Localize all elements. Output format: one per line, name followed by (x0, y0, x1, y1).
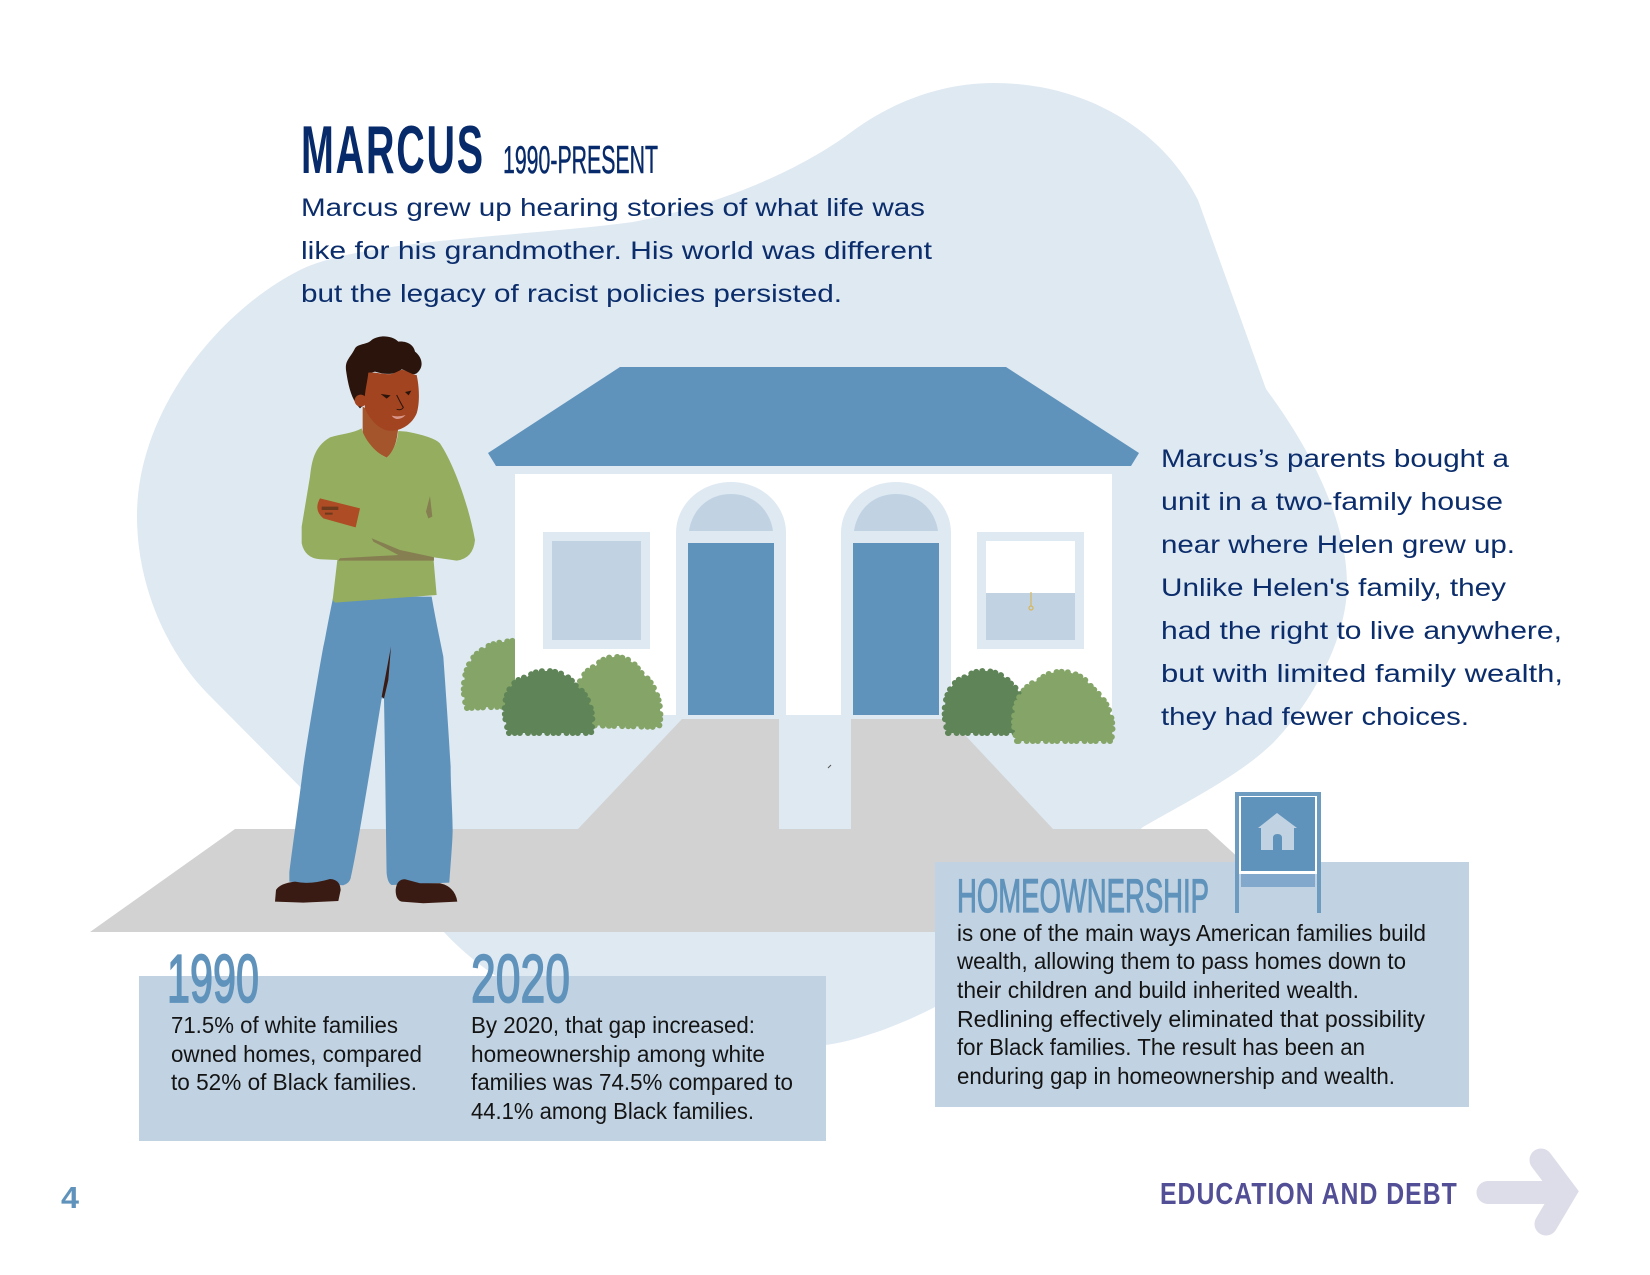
light bush right (1014, 672, 1112, 741)
homeownership text: enduring gap in homeownership and wealth. (957, 1063, 1395, 1089)
house paragraph (1161, 445, 1563, 731)
trousers and shoes (275, 597, 457, 903)
panel: homeownership (935, 862, 1469, 1107)
house paragraph: Marcus’s parents bought a (1161, 445, 1509, 473)
page number: 4 (61, 1180, 80, 1215)
homeownership text: wealth, allowing them to pass homes down to (956, 948, 1406, 974)
house paragraph: had the right to live anywhere, (1161, 617, 1562, 645)
intro text: but the legacy of racist policies persisted. (301, 280, 842, 308)
left door (676, 482, 786, 719)
house paragraph: they had fewer choices. (1161, 703, 1469, 731)
house paragraph: unit in a two-family house (1161, 488, 1503, 516)
homeownership text: for Black families. The result has been an (957, 1034, 1365, 1060)
homeownership text: their children and build inherited wealth. (957, 977, 1359, 1003)
intro text: Marcus grew up hearing stories of what life was (301, 194, 925, 222)
2020 text: 44.1% among Black families. (471, 1098, 754, 1124)
house wall (515, 474, 1112, 715)
arrow (1488, 1160, 1565, 1224)
1990 text: owned homes, compared (171, 1041, 422, 1067)
speck on path (828, 765, 831, 768)
upper body (302, 336, 475, 603)
intro text (301, 194, 932, 308)
1990 text (171, 1012, 422, 1095)
right window (977, 532, 1084, 649)
2020 text (471, 1012, 793, 1124)
roof (488, 367, 1139, 466)
icon: for sale sign with house (1235, 792, 1321, 913)
1990 text: 71.5% of white families (171, 1012, 398, 1038)
homeownership heading: HOMEOWNERSHIP (957, 869, 1209, 922)
panel: homeownership statistics (139, 941, 826, 1141)
1990 text: to 52% of Black families. (171, 1069, 417, 1095)
dark bush left (505, 671, 592, 733)
next section label: EDUCATION AND DEBT (1160, 1176, 1457, 1211)
2020 text: families was 74.5% compared to (471, 1069, 793, 1095)
bushes (505, 657, 1112, 741)
light bush left (575, 657, 660, 727)
2020 heading: 2020 (471, 941, 570, 1017)
homeownership text (956, 920, 1426, 1089)
2020 text: homeownership among white (471, 1041, 765, 1067)
ground and walkway (90, 719, 1320, 932)
background blob (137, 83, 1347, 1045)
left window (543, 532, 650, 649)
house (488, 367, 1139, 719)
right door (841, 482, 951, 719)
bush behind house (464, 640, 520, 708)
homeownership text: Redlining effectively eliminated that possibility (957, 1006, 1425, 1032)
intro text: like for his grandmother. His world was different (301, 237, 932, 265)
dark bush right (945, 671, 1027, 733)
homeownership text: is one of the main ways American families build (957, 920, 1426, 946)
1990 heading: 1990 (167, 941, 259, 1017)
title years: 1990-PRESENT (503, 139, 658, 182)
house paragraph: Unlike Helen's family, they (1161, 574, 1507, 602)
2020 text: By 2020, that gap increased: (471, 1012, 755, 1038)
house paragraph: near where Helen grew up. (1161, 531, 1515, 559)
title (301, 112, 658, 188)
person (275, 336, 475, 903)
house paragraph: but with limited family wealth, (1161, 660, 1563, 688)
title name: MARCUS (301, 112, 483, 188)
